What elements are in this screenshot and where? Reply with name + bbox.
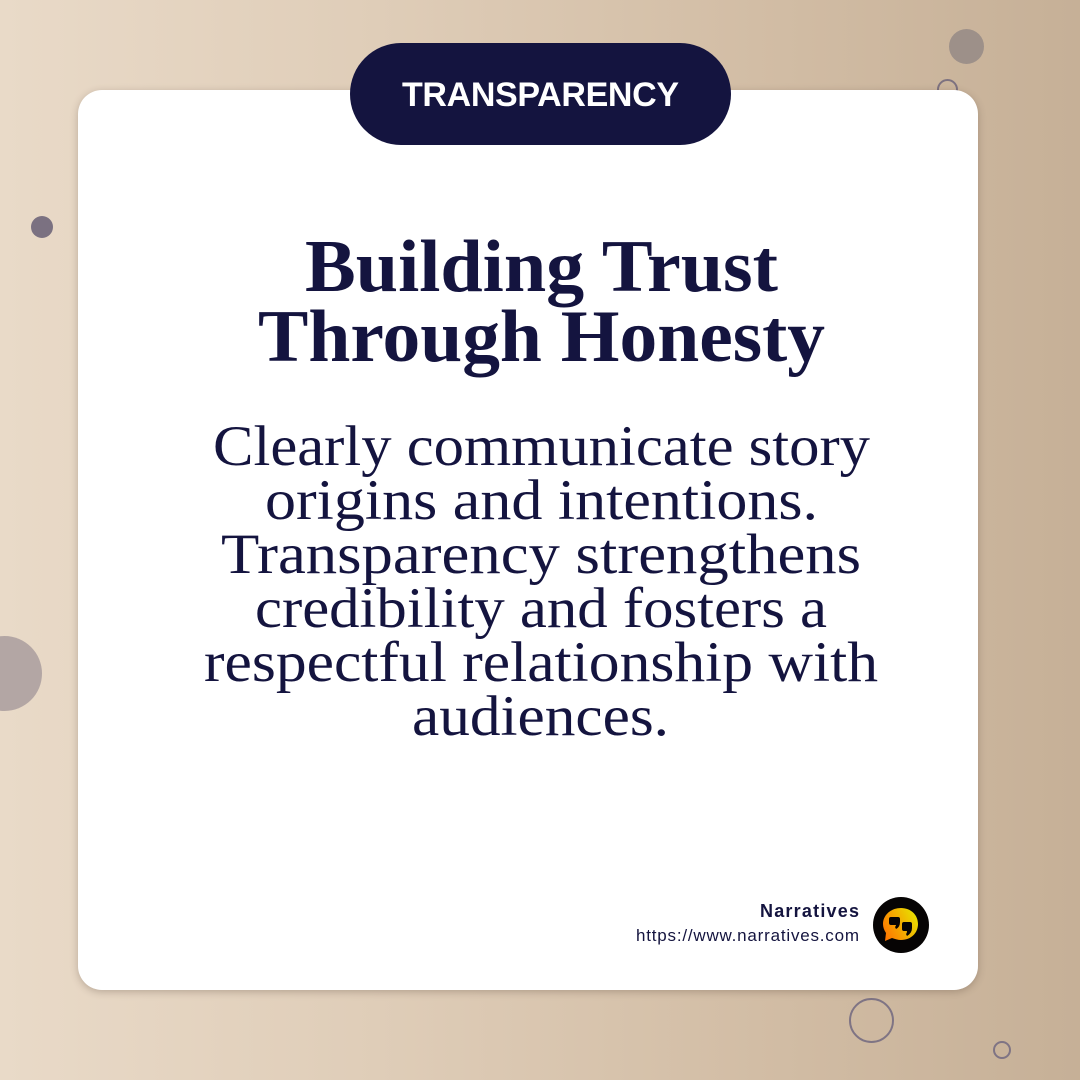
body text: [204, 415, 878, 748]
body text: Clearly communicate story: [213, 415, 871, 478]
body text: Transparency strengthens: [221, 523, 861, 586]
title: Through Honesty: [258, 296, 825, 378]
pill label: TRANSPARENCY: [402, 76, 679, 114]
body text: origins and intentions.: [265, 469, 818, 532]
decorative circle: bottom ring small: [993, 1041, 1011, 1059]
body text: credibility and fosters a: [255, 577, 827, 640]
title: [258, 226, 825, 378]
title: Building Trust: [305, 226, 778, 308]
decorative circle: top right filled: [949, 29, 984, 64]
decorative circle: left large: [0, 636, 42, 711]
white card panel: [78, 90, 978, 990]
brand url: https://www.narratives.com: [636, 926, 859, 945]
decorative circle: top right ring: [937, 79, 958, 100]
body text: respectful relationship with: [204, 631, 878, 694]
heading pill: [350, 43, 731, 145]
body text: audiences.: [412, 685, 669, 748]
decorative circle: left small: [31, 216, 53, 238]
brand name: Narratives: [760, 901, 859, 921]
decorative circle: bottom ring large: [849, 998, 894, 1043]
icon: speech bubble logo: [873, 897, 929, 953]
